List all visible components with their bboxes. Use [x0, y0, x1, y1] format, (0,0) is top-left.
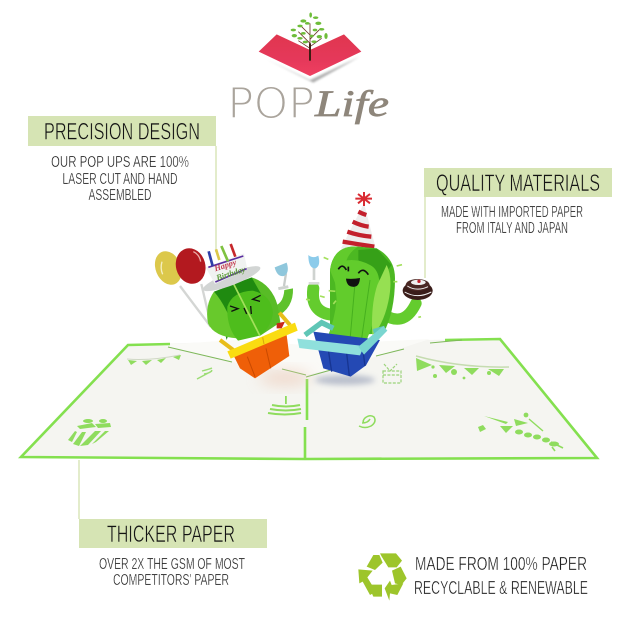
logo: [227, 12, 389, 127]
balloons: [150, 245, 211, 327]
pop-up slits: [168, 340, 462, 377]
body text: LASER CUT AND HAND: [62, 171, 178, 188]
pop-up card: [20, 339, 597, 459]
birthday hat: [201, 244, 263, 296]
heading: THICKER PAPER: [107, 521, 235, 548]
panel: thicker paper: [79, 519, 267, 589]
left wing: [207, 292, 237, 338]
body text: OVER 2X THE GSM OF MOST: [99, 556, 245, 573]
cutout: bunting right: [416, 356, 509, 379]
cutouts on left panel: [68, 355, 301, 446]
glass: [308, 255, 319, 283]
card left panel: [20, 342, 305, 459]
cutouts on right panel: [359, 356, 563, 451]
cutout: gift left: [68, 419, 111, 446]
dark inner: [214, 277, 262, 340]
heading: PRECISION DESIGN: [44, 118, 200, 146]
right cactus: [297, 192, 433, 377]
cutout: bunting left: [127, 355, 181, 365]
card centre fold: [305, 379, 307, 458]
body text: [99, 556, 245, 589]
card right panel: [305, 339, 597, 459]
chocolate cake: [403, 279, 433, 300]
front disc: [227, 291, 273, 341]
panel: precision design: [28, 116, 216, 204]
logo chevron: [259, 34, 361, 76]
cutout: swirl right: [359, 416, 375, 428]
heading banner: [79, 519, 267, 548]
birthday hat: Birthday: [214, 265, 247, 283]
logo wordmark Life: Life: [314, 84, 389, 125]
card green border: [21, 339, 597, 459]
right arrow: [392, 567, 407, 585]
body text: OUR POP UPS ARE 100%: [51, 154, 189, 171]
cactus body: [306, 247, 421, 340]
heading banner: [424, 168, 612, 197]
body text: COMPETITORS' PAPER: [113, 572, 229, 589]
cutout: swirl: [197, 368, 212, 379]
connector lines: [79, 146, 425, 519]
cactus arm and glass: [272, 263, 293, 317]
logo tree: [291, 12, 328, 61]
pot shadows: [259, 370, 311, 386]
logo wordmark POP: POP: [227, 79, 315, 127]
card top pale edge: [160, 339, 430, 375]
recycling text: [414, 554, 588, 598]
party hat: [341, 192, 376, 255]
top arrow: [380, 553, 402, 567]
panel: quality materials: [424, 168, 612, 237]
right wing: [252, 277, 280, 336]
cutout: gift outline: [383, 364, 401, 383]
cactus arms: [313, 288, 416, 319]
hat lettering: Happy: [212, 258, 238, 274]
cutout: party horn: [478, 413, 563, 451]
blue pot: [297, 323, 387, 377]
body text: ASSEMBLED: [88, 187, 152, 204]
heading banner: [28, 116, 216, 146]
cutout: cake: [268, 396, 301, 414]
orange pot: [220, 313, 298, 378]
cactus body: [207, 277, 280, 341]
body text: [441, 204, 583, 237]
left arrow: [358, 569, 376, 595]
logo shadow: [267, 57, 360, 83]
body text: [51, 154, 189, 204]
recycling icon: [358, 553, 407, 601]
left cactus: [150, 244, 298, 378]
